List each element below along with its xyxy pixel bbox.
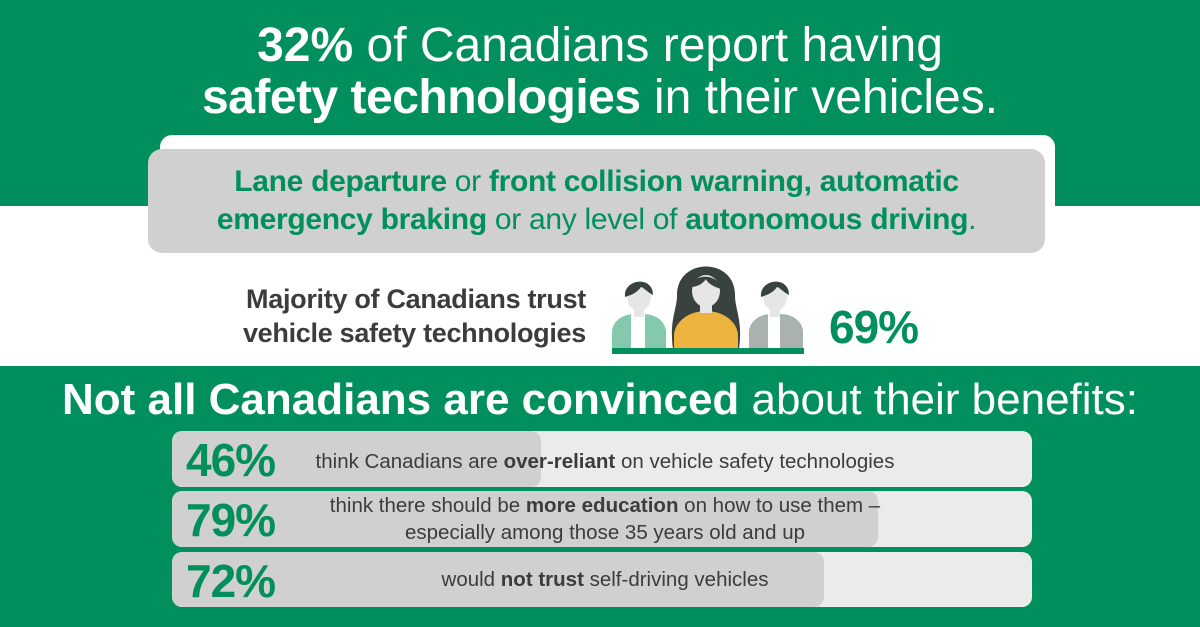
title — [202, 19, 998, 124]
subheading: Not all Canadians are convinced about their benefits: — [62, 375, 1138, 424]
trust text: Majority of Canadians trust — [246, 284, 586, 314]
top green band — [0, 0, 1200, 206]
definition box: emergency braking or any level of autonomous driving. — [217, 203, 976, 236]
bar row 72% — [172, 552, 1032, 607]
bar row 79% — [172, 491, 1032, 547]
bar row 46%: think Canadians are over-reliant on vehicle safety technologies — [316, 450, 894, 473]
bar row 72%: 72% — [186, 555, 275, 607]
white card — [160, 135, 1055, 265]
trust text — [243, 284, 586, 348]
bar row 46% — [172, 431, 1032, 487]
bar row 79%: 79% — [186, 494, 275, 546]
bar row 72%: would not trust self-driving vehicles — [442, 568, 768, 591]
stat 69%: 69% — [829, 301, 918, 353]
title: safety technologies in their vehicles. — [202, 71, 998, 124]
bar row 79%: think there should be more education on how to use them – — [330, 494, 880, 517]
definition box: Lane departure or front collision warning, automatic — [234, 165, 959, 198]
trust text: vehicle safety technologies — [243, 318, 586, 348]
bar row 46%: 46% — [186, 434, 275, 486]
bottom green band — [0, 366, 1200, 627]
title: 32% of Canadians report having — [257, 19, 943, 72]
icon: people — [612, 266, 804, 354]
bar row 79%: especially among those 35 years old and up — [405, 521, 805, 544]
definition box — [148, 149, 1045, 253]
